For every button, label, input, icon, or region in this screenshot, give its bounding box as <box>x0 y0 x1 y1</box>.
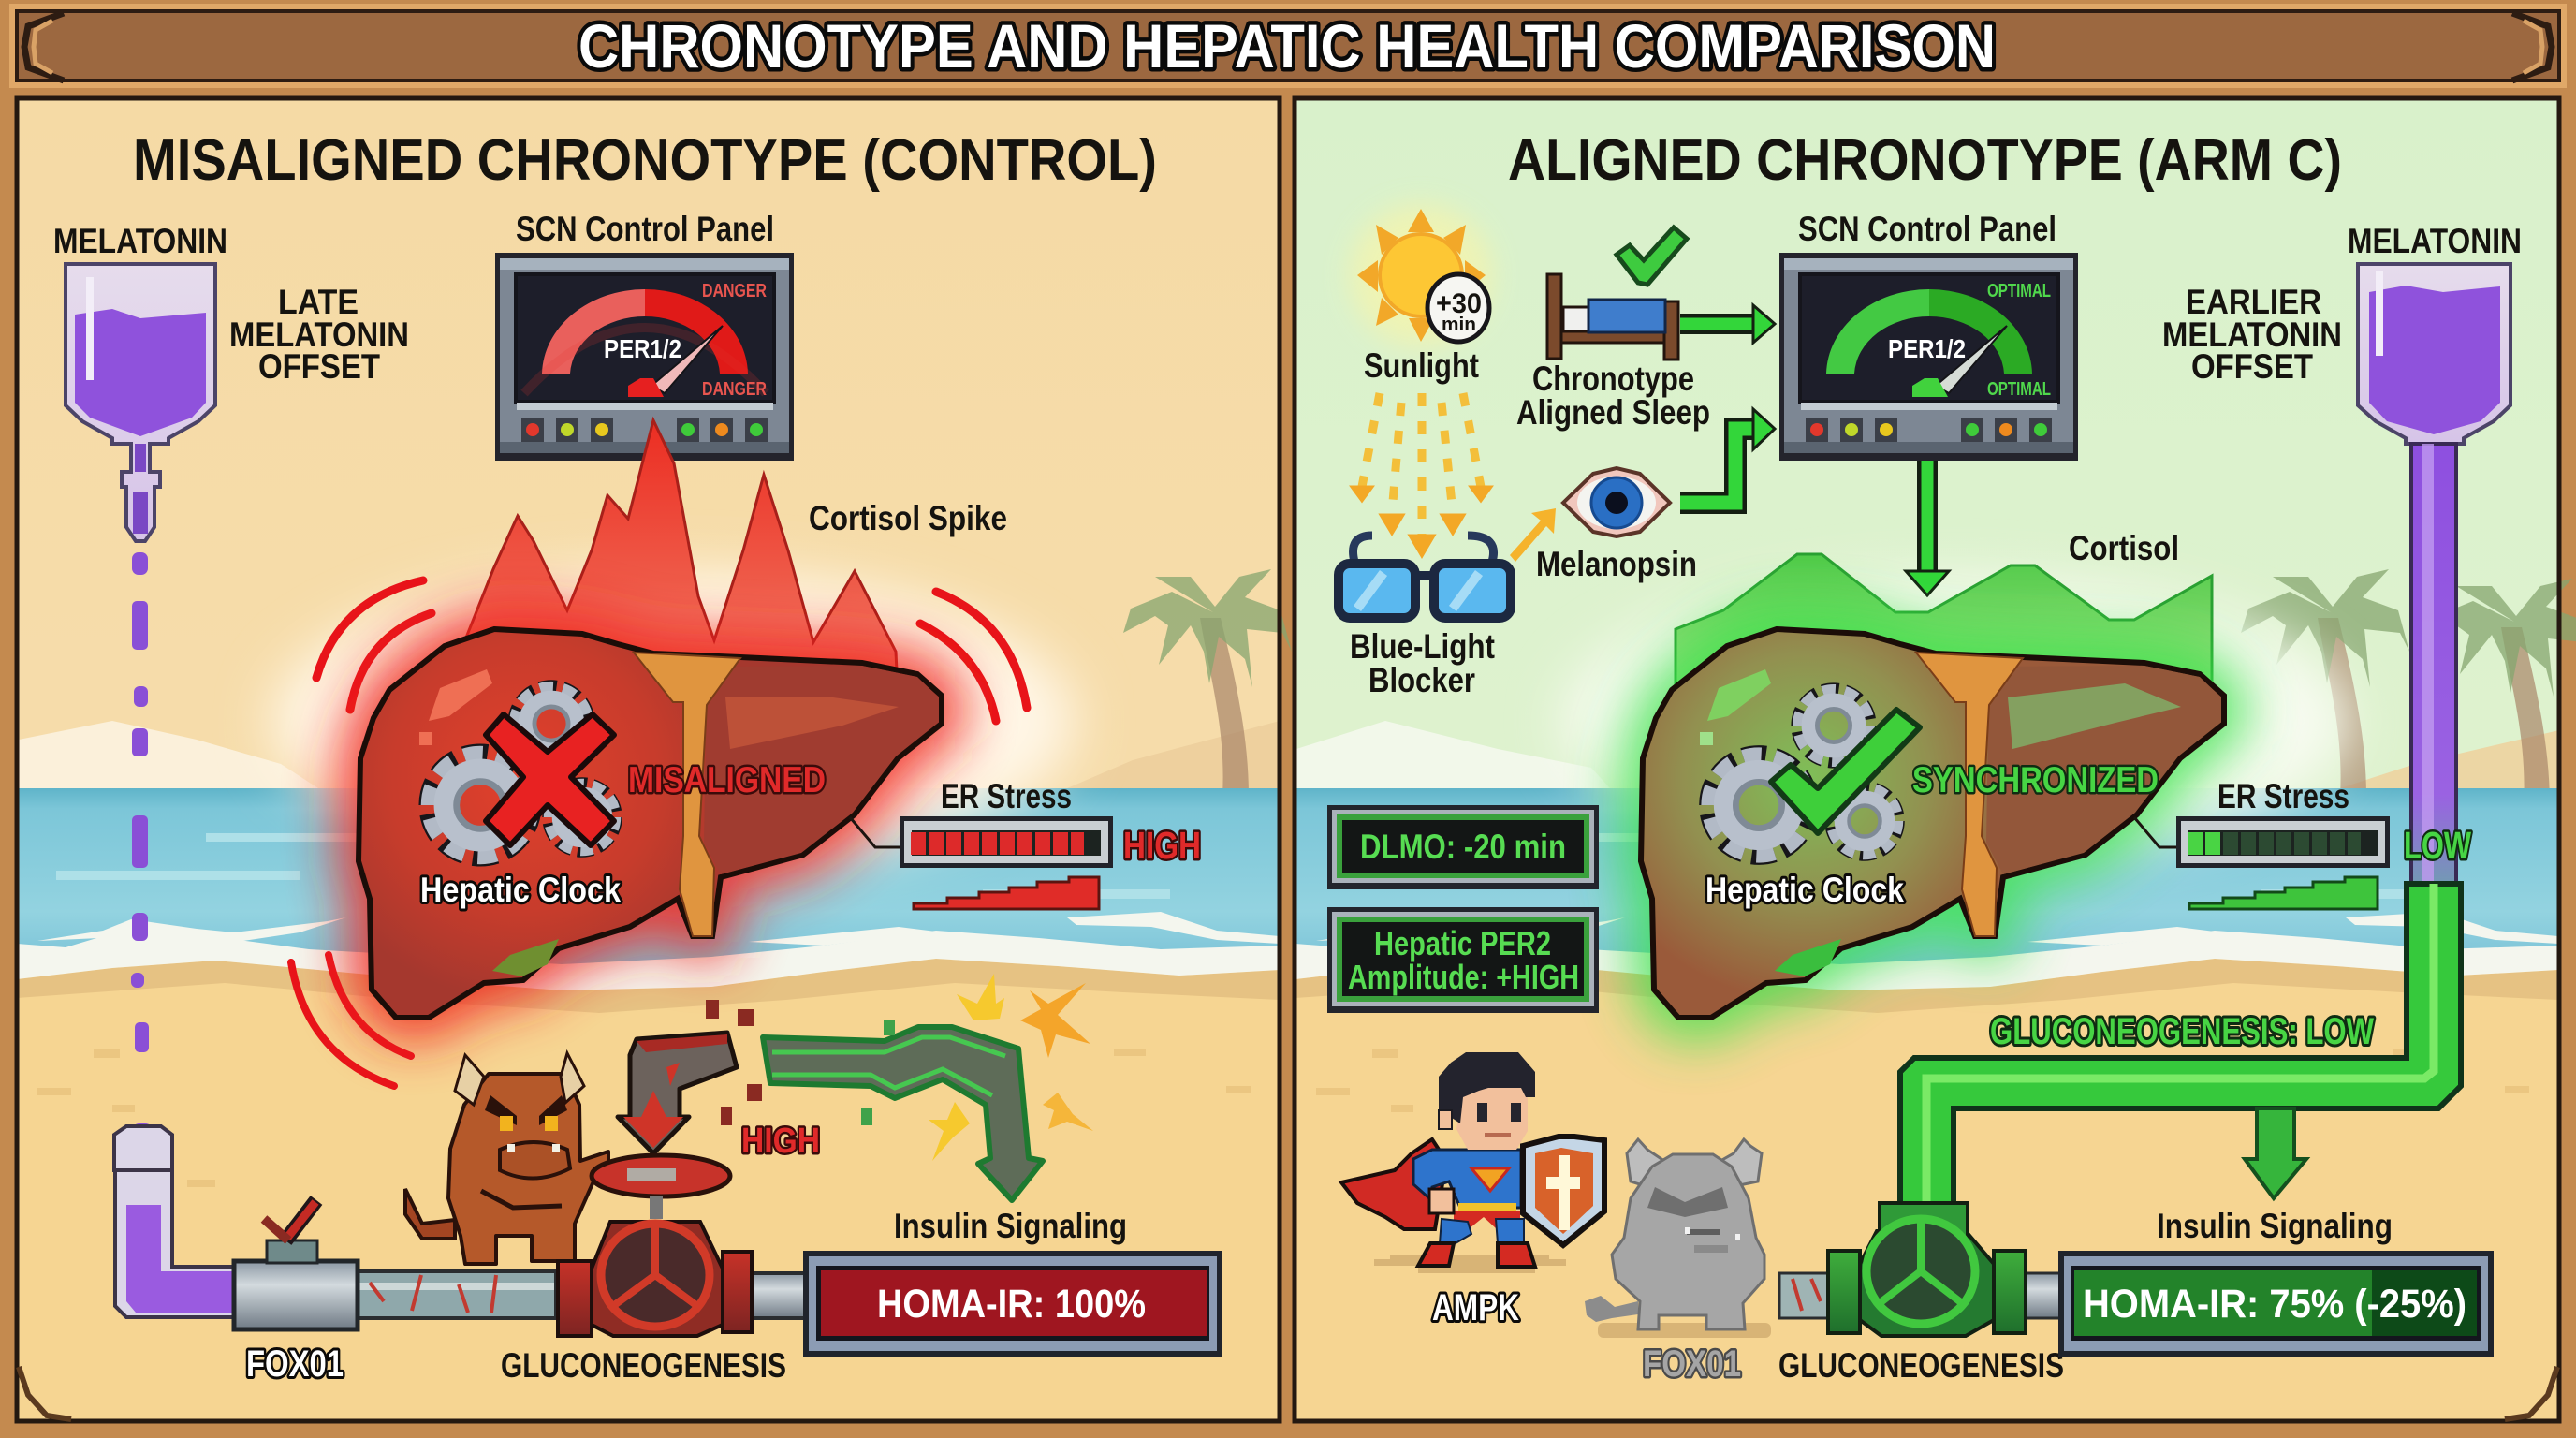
late melatonin offset label: OFFSET <box>258 347 380 386</box>
liver: red glow <box>359 629 942 1018</box>
insulin signaling label: Insulin Signaling <box>2157 1207 2393 1245</box>
HOMA-IR value: HOMA-IR: 100% <box>877 1282 1146 1327</box>
blue-light blocker label: Blocker <box>1368 661 1475 699</box>
cortisol label: Cortisol <box>2069 529 2179 567</box>
broken red arrow <box>618 1033 737 1153</box>
SCN control panel label: SCN Control Panel <box>1798 210 2056 248</box>
icon: sunlight rays <box>1352 393 1491 556</box>
green arrow: insulin signaling <box>2245 1108 2306 1198</box>
late melatonin offset label: MELATONIN <box>229 315 409 354</box>
gluconeogenesis low label: GLUCONEOGENESIS: LOW <box>1990 1011 2374 1052</box>
hepatic clock gears with green check <box>1713 693 1920 852</box>
+30 min badge <box>1427 274 1489 342</box>
panel background: beach scene <box>17 98 1292 1421</box>
shield <box>1523 1137 1604 1245</box>
SCN control panel: danger gauge <box>495 253 794 461</box>
character: grey FOX01 monster <box>1585 1139 1771 1338</box>
+30 min badge: min <box>1442 315 1476 335</box>
gluconeogenesis label: GLUCONEOGENESIS <box>1778 1346 2064 1385</box>
broken green arrow: insulin signaling <box>763 1027 1043 1200</box>
SCN control panel: optimal gauge <box>1779 253 2078 461</box>
icon: blue-light blocker glasses <box>1339 536 1511 618</box>
green pipe: melatonin to gluconeogenesis <box>1900 884 2461 1208</box>
high label: HIGH <box>1123 824 1201 867</box>
chronotype aligned sleep label: Aligned Sleep <box>1516 393 1710 432</box>
FOX01 label (inactive): FOX01 <box>1643 1343 1741 1385</box>
panel background: beach scene <box>1295 98 2576 1421</box>
hepatic PER2 amplitude readout: Amplitude: +HIGH <box>1348 958 1579 996</box>
blue-light blocker label: Blue-Light <box>1350 627 1495 666</box>
connector <box>850 817 900 847</box>
melanopsin label: Melanopsin <box>1536 545 1697 583</box>
gluconeogenesis label: GLUCONEOGENESIS <box>501 1346 786 1385</box>
synchronized label: SYNCHRONIZED <box>1912 760 2159 800</box>
halo behind liver <box>271 571 1076 871</box>
SCN control panel label: SCN Control Panel <box>516 210 774 248</box>
gluconeogenesis devil <box>405 1053 608 1264</box>
er stress label: ER Stress <box>2217 777 2349 815</box>
character: AMPK hero <box>1341 1052 1604 1273</box>
AMPK label: AMPK <box>1432 1287 1519 1328</box>
chronotype aligned sleep label: Chronotype <box>1532 360 1694 398</box>
melatonin drops <box>131 552 154 1165</box>
late melatonin offset label <box>229 283 409 386</box>
DLMO readout <box>1327 805 1599 889</box>
yellow arrow to eye <box>1510 508 1556 562</box>
gluconeogenesis valve: green <box>1779 1203 2061 1336</box>
frame corner ornaments <box>19 1367 2557 1419</box>
connector <box>2134 817 2176 847</box>
SCN control panel: optimal gauge: OPTIMAL <box>1987 379 2051 400</box>
melatonin label: MELATONIN <box>53 222 227 260</box>
hepatic clock label: Hepatic Clock <box>1705 871 1904 909</box>
chronotype aligned sleep label <box>1516 360 1710 432</box>
er stress label: ER Stress <box>941 777 1072 815</box>
stair bar chart: high <box>914 877 1099 909</box>
icon: melatonin IV bag with tube <box>2358 264 2510 893</box>
panel: aligned chronotype (arm C) <box>1295 98 2576 1421</box>
title banner <box>9 4 2567 88</box>
DLMO readout: DLMO: -20 min <box>1360 828 1566 866</box>
liver: green glow <box>1641 629 2224 1018</box>
icon: melatonin IV bag <box>66 264 215 541</box>
SCN control panel: danger gauge: DANGER <box>702 379 767 400</box>
halo behind liver <box>1563 580 2349 861</box>
er stress meter: low <box>2176 816 2390 868</box>
er stress meter: high <box>900 816 1113 868</box>
pipe system <box>114 1126 809 1318</box>
sparks and debris <box>706 974 1093 1161</box>
icon: bed <box>1547 274 1678 360</box>
cortisol spike label: Cortisol Spike <box>809 499 1007 537</box>
title: CHRONOTYPE AND HEPATIC HEALTH COMPARISON <box>578 11 1996 81</box>
icon: check mark <box>1617 227 1687 285</box>
FOX01 coupling with lever <box>234 1200 358 1329</box>
icon: melanopsin eye <box>1563 468 1670 536</box>
hepatic clock label: Hepatic Clock <box>420 871 621 909</box>
HOMA-IR meter: 100% <box>803 1251 1222 1357</box>
green arrow: panel to liver <box>1906 461 1949 595</box>
panel heading: MISALIGNED CHRONOTYPE (CONTROL) <box>133 128 1157 193</box>
low label: LOW <box>2404 824 2471 867</box>
gluconeogenesis valve: red <box>558 1155 752 1336</box>
hepatic PER2 amplitude readout <box>1327 907 1599 1013</box>
cortisol curve chart <box>1676 554 2212 712</box>
earlier melatonin offset label <box>2162 283 2342 386</box>
SCN control panel: danger gauge: DANGER <box>702 281 767 301</box>
warning arcs <box>291 580 1027 1086</box>
+30 min badge: +30 <box>1436 288 1482 319</box>
misaligned label: MISALIGNED <box>628 760 826 800</box>
earlier melatonin offset label: EARLIER <box>2186 283 2321 321</box>
hepatic PER2 amplitude readout: Hepatic PER2 <box>1374 924 1551 962</box>
stair bar chart: low <box>2189 877 2378 909</box>
icon: sun with +30 min badge <box>1350 204 1492 346</box>
melatonin label: MELATONIN <box>2348 222 2522 260</box>
green arrow: sleep to panel <box>1680 305 1775 343</box>
HOMA-IR value: HOMA-IR: 75% (-25%) <box>2083 1282 2466 1327</box>
panel: misaligned chronotype (control) <box>17 98 1292 1421</box>
liver: misaligned <box>359 629 942 1018</box>
HOMA-IR meter: 75% <box>2058 1251 2494 1357</box>
hepatic clock gears with red X <box>432 690 614 853</box>
SCN control panel: danger gauge: PER1/2 <box>604 334 681 363</box>
insulin signaling label: Insulin Signaling <box>894 1207 1127 1245</box>
SCN control panel: optimal gauge: OPTIMAL <box>1987 281 2051 301</box>
sunlight label: Sunlight <box>1364 346 1479 385</box>
cortisol spike chart <box>464 420 899 712</box>
late melatonin offset label: LATE <box>278 283 359 321</box>
green arrow: eye to panel <box>1680 409 1775 503</box>
panel heading: ALIGNED CHRONOTYPE (ARM C) <box>1508 128 2342 193</box>
SCN control panel: optimal gauge: PER1/2 <box>1888 334 1966 363</box>
blue-light blocker label <box>1350 627 1495 699</box>
high label: HIGH <box>741 1122 820 1161</box>
FOX01 label: FOX01 <box>246 1343 344 1385</box>
liver: synchronized <box>1641 629 2224 1018</box>
earlier melatonin offset label: OFFSET <box>2191 347 2313 386</box>
earlier melatonin offset label: MELATONIN <box>2162 315 2342 354</box>
